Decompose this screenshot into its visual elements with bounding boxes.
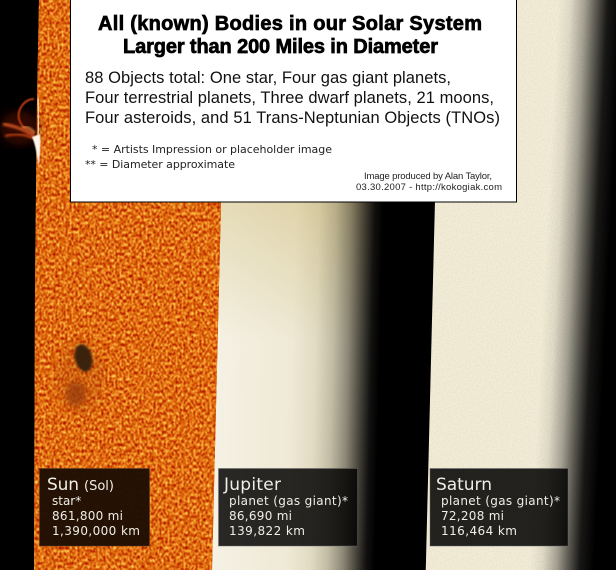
- panel: Jupiter surface: [212, 0, 440, 570]
- text block: object summary: Four asteroids, and 51 Trans-Neptunian Objects (TNOs): [85, 109, 500, 127]
- panel: Saturn label: planet (gas giant)*: [441, 494, 560, 508]
- panel: Sun label: [40, 468, 150, 546]
- panel: Sun surface: [30, 0, 230, 570]
- panel: Sun label: 861,800 mi: [52, 509, 123, 523]
- panel: Jupiter label: 139,822 km: [229, 524, 305, 538]
- panel: Saturn label: [430, 468, 568, 546]
- text block: footnotes: ** = Diameter approximate: [85, 158, 235, 171]
- icon: lower sunspot: [66, 382, 86, 406]
- panel: Jupiter label: Jupiter: [223, 475, 281, 495]
- text block: credit: Image produced by Alan Taylor,: [364, 171, 492, 182]
- panel: Jupiter label: planet (gas giant)*: [229, 494, 348, 508]
- icon: sunspot: [72, 342, 95, 374]
- heading: All (known) Bodies in our Solar System: [98, 13, 482, 35]
- text block: object summary: [85, 69, 500, 127]
- text block: credit: 03.30.2007 - http://kokogiak.com: [356, 182, 502, 193]
- panel: Sun label: 1,390,000 km: [52, 524, 140, 538]
- text block: footnotes: [85, 143, 332, 171]
- text block: object summary: 88 Objects total: One star, Four gas giant planets,: [85, 69, 451, 87]
- icon: sunspot penumbra: [56, 342, 104, 414]
- panel: Sun label: Sun: [47, 475, 79, 495]
- panel: Jupiter label: [218, 468, 358, 546]
- panel: Jupiter label: 86,690 mi: [229, 509, 292, 523]
- icon: solar prominence: [0, 98, 40, 166]
- panel: Saturn surface: [425, 0, 616, 570]
- text block: credit: [356, 171, 502, 193]
- text block: footnotes: * = Artists Impression or placeholder image: [92, 143, 332, 156]
- heading: [98, 13, 482, 58]
- heading: Larger than 200 Miles in Diameter: [123, 36, 438, 58]
- panel: Saturn label: 116,464 km: [441, 524, 517, 538]
- text block: object summary: Four terrestrial planets, Three dwarf planets, 21 moons,: [85, 89, 494, 107]
- panel: Saturn label: Saturn: [436, 475, 492, 495]
- panel: title card: [70, 0, 516, 202]
- panel: Saturn label: 72,208 mi: [441, 509, 504, 523]
- panel: Sun label: (Sol): [84, 479, 114, 494]
- panel: Sun label: star*: [52, 494, 81, 508]
